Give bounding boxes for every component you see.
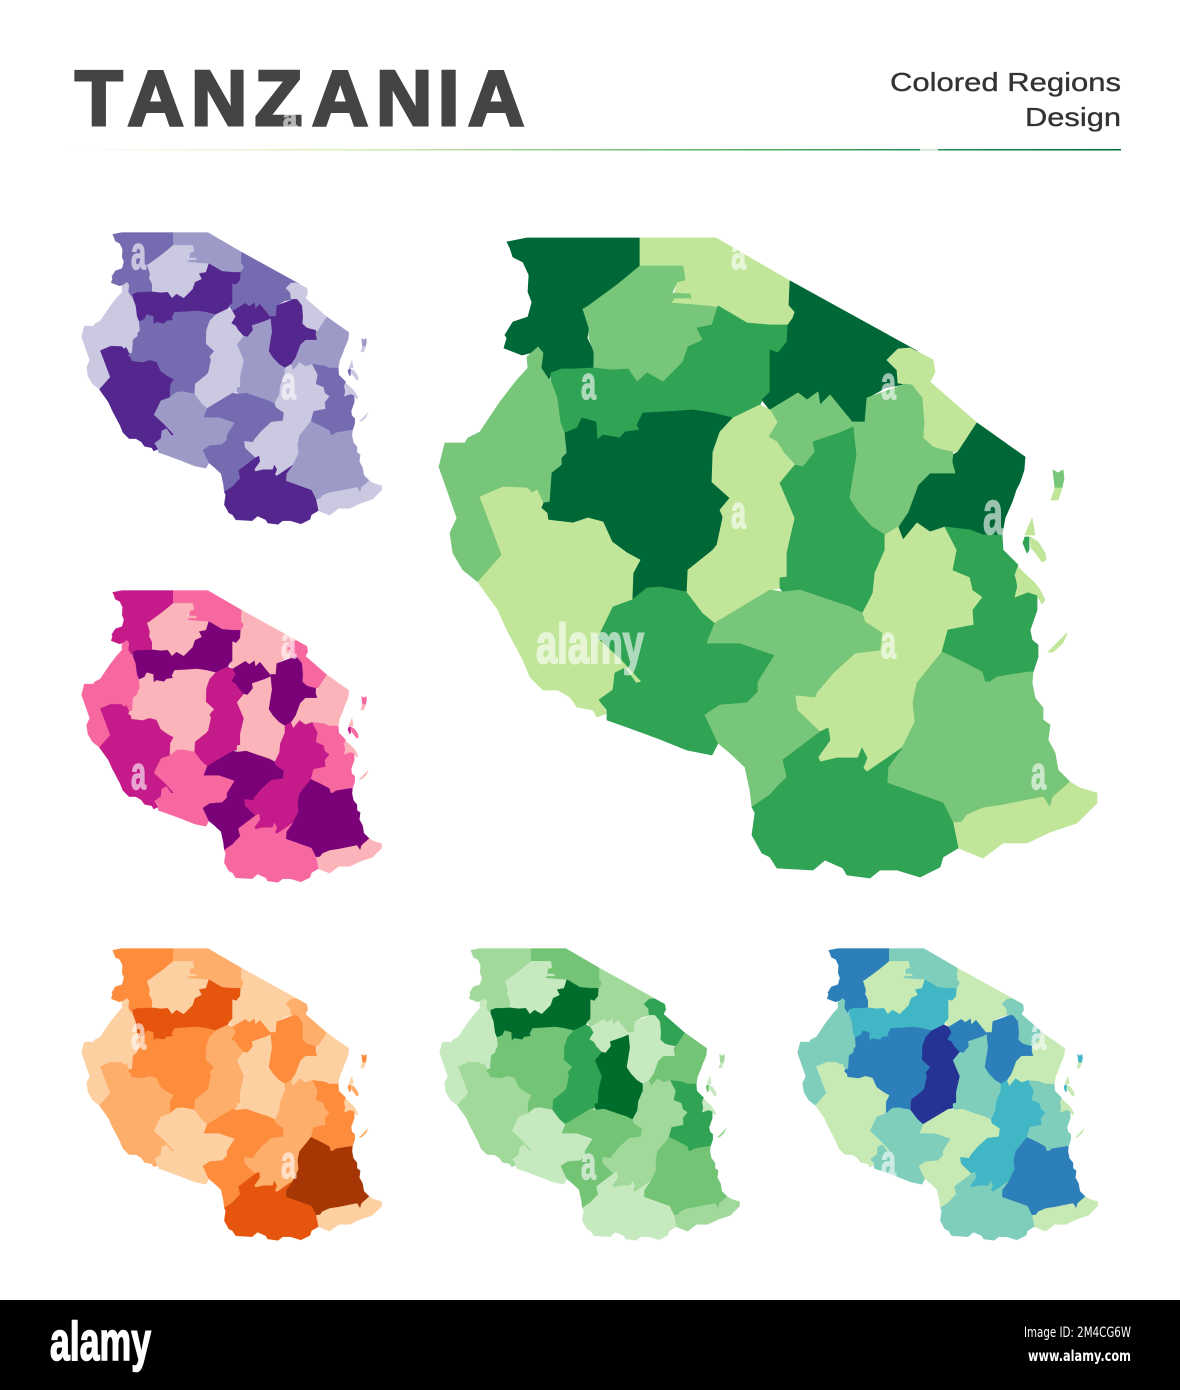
watermark letters: a (731, 486, 746, 538)
watermark letters: a (881, 1135, 896, 1187)
watermark letters: a (281, 1136, 296, 1188)
footer bar: alamy (50, 1310, 151, 1372)
small map: green (440, 949, 740, 1240)
region: central west (687, 405, 795, 623)
region: north central (849, 384, 955, 535)
watermark letters: a (283, 102, 297, 135)
region: south central (705, 590, 882, 807)
region: central (780, 427, 885, 613)
watermark letters: a (131, 227, 146, 279)
subtitle: Design (1025, 102, 1121, 132)
region: northeast (898, 423, 1025, 540)
region: east central (795, 523, 983, 772)
region: south of lake (583, 266, 717, 382)
watermark letters: a (281, 357, 296, 409)
small map: pink (82, 591, 382, 882)
large map: green (439, 238, 1097, 878)
region: small central (768, 392, 853, 467)
watermark letters: a (581, 357, 596, 409)
footer bar (0, 1300, 1180, 1390)
watermark: alamy: alamy (536, 612, 644, 675)
watermark letters: a (131, 747, 146, 799)
region: west central (541, 410, 733, 600)
region: north lake (640, 238, 795, 325)
watermark letters: a (983, 479, 1003, 548)
watermark letters: a (1031, 747, 1046, 799)
watermark letters: a (1031, 1007, 1046, 1059)
watermark letters: a (881, 357, 896, 409)
region: northern strip (887, 348, 977, 452)
region: west (439, 347, 567, 582)
region: southeast (887, 652, 1070, 823)
watermark letters: a (731, 227, 746, 279)
region: south (752, 728, 958, 878)
watermark letters: a (581, 1137, 596, 1189)
watermark letters: a (131, 1007, 146, 1059)
small map: orange (82, 949, 382, 1240)
region: central band (551, 306, 788, 440)
region: far southeast (953, 782, 1097, 858)
region: southwest (478, 487, 642, 717)
small map: purple (82, 233, 382, 524)
title: TANZANIA (75, 54, 524, 142)
footer bar: Image ID: 2M4CG6W (1024, 1325, 1131, 1341)
watermark letters: a (281, 616, 296, 668)
region: coastal city (1015, 567, 1045, 604)
footer bar: www.alamy.com (1028, 1347, 1131, 1365)
subtitle (890, 67, 1121, 132)
small map: blue (798, 949, 1098, 1240)
region: northwest (504, 238, 640, 380)
region: south west highlands (598, 587, 775, 755)
region: north (762, 281, 917, 422)
watermark letters (131, 102, 1046, 1189)
islands (1023, 470, 1067, 652)
region: coast (942, 527, 1038, 682)
subtitle: Colored Regions (890, 67, 1121, 97)
watermark letters: a (881, 616, 896, 668)
